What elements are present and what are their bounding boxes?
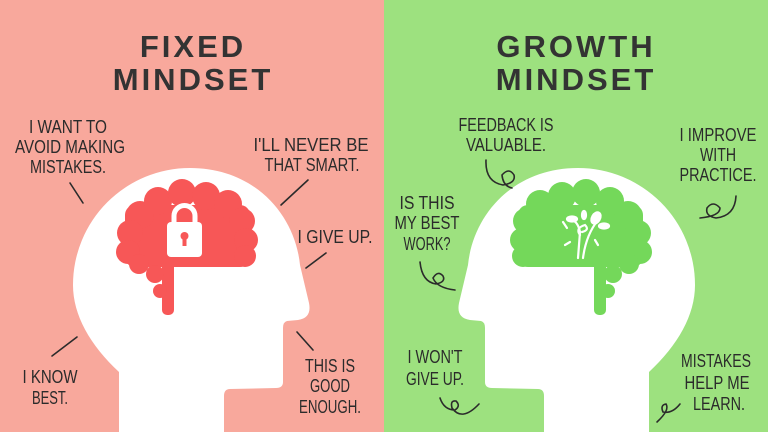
text: avoid mistakes	[15, 117, 125, 203]
text: mistakes help: HELP ME	[684, 373, 750, 393]
text: best work	[394, 193, 460, 290]
text: know best: I KNOW	[22, 367, 78, 387]
text: best work: IS THIS	[400, 193, 454, 213]
text: avoid mistakes: MISTAKES.	[30, 157, 106, 177]
text: won't give up: GIVE UP.	[406, 369, 464, 389]
title: fixed mindset	[113, 29, 273, 97]
text: good enough	[297, 332, 361, 417]
text: best work: MY BEST	[394, 213, 460, 233]
title: growth mindset	[496, 29, 656, 97]
title: growth mindset: MINDSET	[496, 62, 656, 97]
text: avoid mistakes: AVOID MAKING	[15, 137, 125, 157]
text: mistakes help: MISTAKES	[681, 351, 751, 371]
text: never smart: I'LL NEVER BE	[254, 135, 368, 155]
text: improve	[680, 125, 756, 218]
text: won't give up	[406, 347, 479, 414]
text: know best	[22, 337, 78, 408]
text: improve: WITH	[700, 145, 736, 165]
text: feedback: VALUABLE.	[466, 135, 546, 155]
text: won't give up: I WON'T	[408, 347, 462, 367]
icon: sprout	[563, 211, 609, 258]
icon: padlock	[167, 206, 202, 257]
text: feedback: FEEDBACK IS	[458, 115, 554, 135]
brain: green growing	[510, 179, 652, 315]
title: growth mindset: GROWTH	[496, 29, 656, 64]
title: fixed mindset: MINDSET	[113, 62, 273, 97]
text: never smart: THAT SMART.	[264, 155, 360, 175]
text: best work: WORK?	[404, 234, 450, 254]
head: fixed	[73, 168, 310, 432]
text: never smart	[254, 135, 368, 205]
text: mistakes help	[657, 351, 751, 422]
title: fixed mindset: FIXED	[140, 29, 246, 64]
head: growth	[458, 168, 695, 432]
text: give up	[298, 227, 372, 268]
text: know best: BEST.	[32, 388, 68, 408]
text: feedback	[458, 115, 554, 188]
text: avoid mistakes: I WANT TO	[29, 117, 107, 137]
text: good enough: GOOD	[310, 376, 350, 396]
text: give up: I GIVE UP.	[298, 227, 372, 247]
text: mistakes help: LEARN.	[693, 394, 745, 414]
text: good enough: THIS IS	[305, 356, 355, 376]
text: good enough: ENOUGH.	[299, 397, 361, 417]
brain: red locked	[116, 179, 258, 315]
